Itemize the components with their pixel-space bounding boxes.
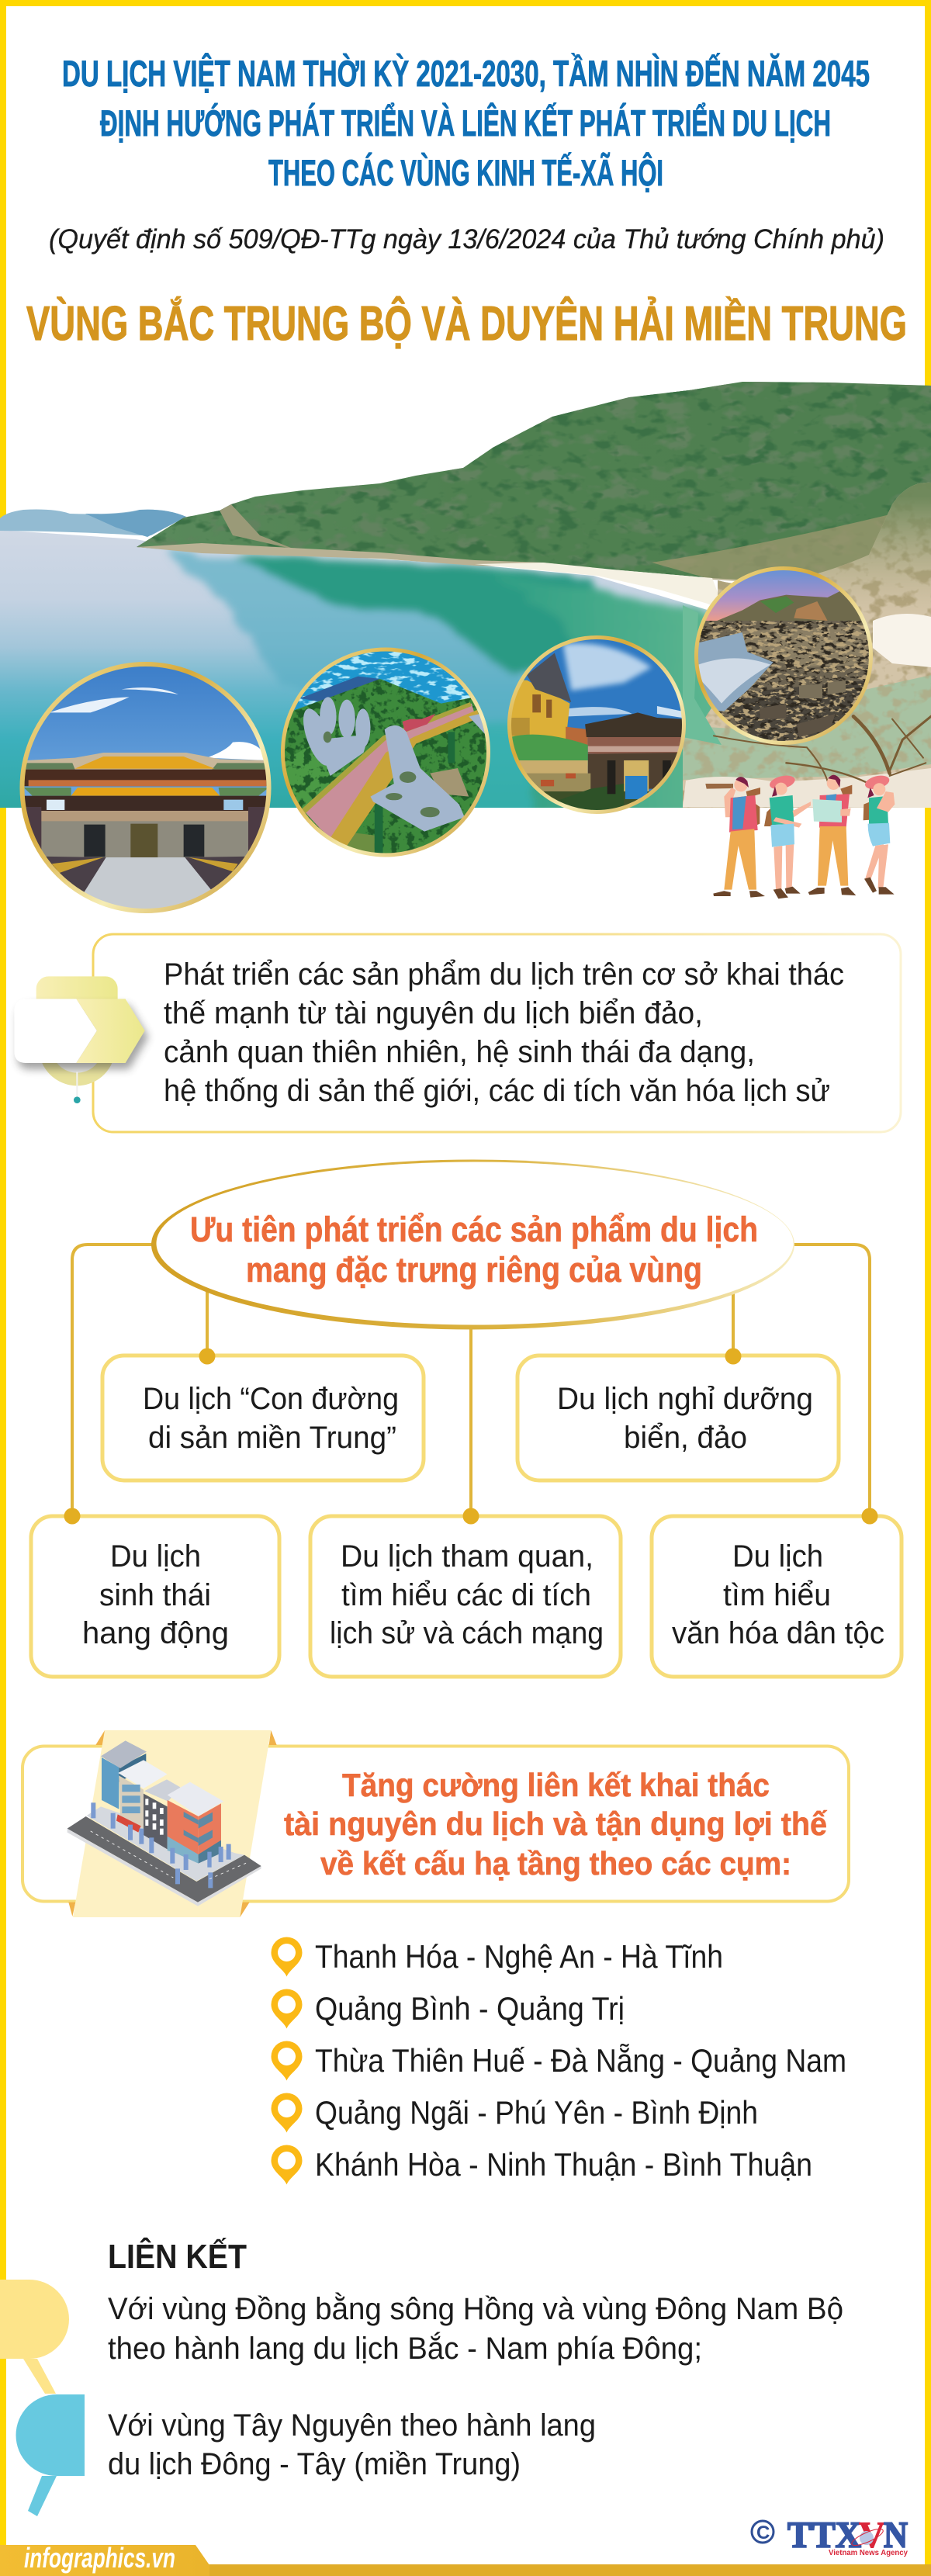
logo: TTXVN: TTX (787, 2515, 861, 2556)
links section: LIÊN KẾT (108, 2237, 247, 2276)
tourist in pink hat (764, 774, 811, 898)
footer bar: infographics.vn (24, 2542, 175, 2574)
cluster list (272, 1937, 846, 2185)
logo: TTXVN: Vietnam News Agency (829, 2548, 908, 2557)
box: văn hóa dân tộc: tìm hiểu (723, 1578, 831, 1612)
panel heading text: tài nguyên du lịch và tận dụng lợi thế (284, 1806, 828, 1842)
links section: Với vùng Đồng bằng sông Hồng và vùng Đông Nam Bộ (108, 2291, 843, 2326)
illustration: isometric street block (67, 1730, 277, 1917)
icon: chevron tag (14, 976, 148, 1103)
sea (0, 531, 711, 808)
footer bar (0, 2542, 931, 2576)
distant mountains (0, 510, 186, 535)
tourist with binoculars (864, 774, 895, 895)
logo: TTXVN: C (756, 2522, 770, 2543)
box: sinh thái hang động (31, 1508, 279, 1677)
box: văn hóa dân tộc: Du lịch (732, 1539, 823, 1574)
connectors from priority ellipse to boxes (72, 1245, 870, 1517)
panel heading text: về kết cấu hạ tầng theo các cụm: (320, 1845, 791, 1882)
panel text (164, 957, 844, 1108)
photo: Hội An Japanese Bridge (505, 634, 687, 820)
tower (102, 1757, 119, 1809)
subtitle: decision reference: (Quyết định số 509/QĐ-TTg ngày 13/6/2024 của Thủ tướng Chính phủ) (49, 224, 884, 254)
logo: TTXVN (752, 2515, 908, 2557)
item: Thanh Hóa: Thanh Hóa - Nghệ An - Hà Tĩnh (315, 1938, 723, 1975)
links section: Với vùng Tây Nguyên theo hành lang (108, 2408, 596, 2443)
item: Khánh Hòa: Khánh Hòa - Ninh Thuận - Bình Thuận (315, 2146, 812, 2183)
links section: theo hành lang du lịch Bắc - Nam phía Đông; (108, 2331, 702, 2366)
links section: du lịch Đông - Tây (miền Trung) (108, 2447, 521, 2481)
illustration: four tourists (705, 774, 895, 898)
photo: Golden Bridge (278, 644, 497, 861)
panel: strengthening links (22, 1730, 849, 1917)
title: THEO CÁC VÙNG KINH TẾ-XÃ HỘI (268, 152, 663, 193)
panel: intro description (14, 934, 901, 1132)
beige block (119, 1775, 144, 1829)
landscape: sea, hill, beach and trees (0, 382, 931, 822)
box: di tích lịch sử và cách mạng: tìm hiểu các di tích (341, 1578, 591, 1612)
box: di tích lịch sử và cách mạng (310, 1508, 621, 1677)
tourist with spyglass (705, 777, 765, 898)
box: nghỉ dưỡng biển đảo (517, 1349, 839, 1480)
panel text: cảnh quan thiên nhiên, hệ sinh thái đa dạng, (164, 1035, 755, 1069)
tree foliage (683, 483, 931, 808)
road markings (91, 1831, 248, 1879)
corner block (168, 1800, 199, 1858)
beach (475, 563, 725, 613)
priority ellipse: mang đặc trưng riêng của vùng (246, 1250, 702, 1290)
box: nghỉ dưỡng biển đảo: biển, đảo (624, 1421, 747, 1455)
priority ellipse: Ưu tiên phát triển các sản phẩm du lịch (190, 1210, 758, 1249)
box: sinh thái hang động: sinh thái (99, 1578, 211, 1612)
title (62, 53, 870, 193)
box: Con đường di sản miền Trung: di sản miền Trung” (148, 1421, 396, 1455)
item: Quảng Bình: Quảng Bình - Quảng Trị (315, 1990, 625, 2027)
panel text: thế mạnh từ tài nguyên du lịch biển đảo, (164, 996, 703, 1030)
panel heading text: Tăng cường liên kết khai thác (342, 1767, 770, 1803)
box: nghỉ dưỡng biển đảo: Du lịch nghỉ dưỡng (557, 1382, 813, 1416)
links section (108, 2237, 843, 2481)
logo: TTXVN: V (859, 2515, 885, 2556)
tree branches (714, 716, 931, 784)
item: Thừa Thiên Huế: Thừa Thiên Huế - Đà Nẵng - Quảng Nam (315, 2042, 846, 2079)
photo: Huế imperial citadel (16, 660, 277, 919)
logo: TTXVN: N (884, 2515, 908, 2556)
box: sinh thái hang động: hang động (82, 1616, 229, 1650)
item: Quảng Ngãi: Quảng Ngãi - Phú Yên - Bình Định (315, 2094, 758, 2131)
tourist holding map (808, 775, 856, 895)
grey block (144, 1794, 168, 1849)
box: văn hóa dân tộc (652, 1508, 902, 1677)
box: Con đường di sản miền Trung (102, 1349, 424, 1480)
pedestrians (91, 1802, 231, 1888)
photo: Gành Đá Đĩa basalt rocks (693, 564, 874, 747)
decorative pin shapes (0, 2280, 85, 2516)
box: văn hóa dân tộc: văn hóa dân tộc (672, 1616, 884, 1650)
box: Con đường di sản miền Trung: Du lịch “Con đường (143, 1382, 399, 1416)
forested hill (137, 382, 931, 583)
box: di tích lịch sử và cách mạng: lịch sử và cách mạng (330, 1616, 604, 1650)
box: sinh thái hang động: Du lịch (110, 1539, 201, 1574)
panel text: hệ thống di sản thế giới, các di tích văn hóa lịch sử (164, 1074, 830, 1108)
priority ellipse (151, 1159, 794, 1330)
panel text: Phát triển các sản phẩm du lịch trên cơ sở khai thác (164, 957, 844, 992)
panel heading text (284, 1767, 828, 1882)
box: di tích lịch sử và cách mạng: Du lịch tham quan, (341, 1539, 594, 1574)
